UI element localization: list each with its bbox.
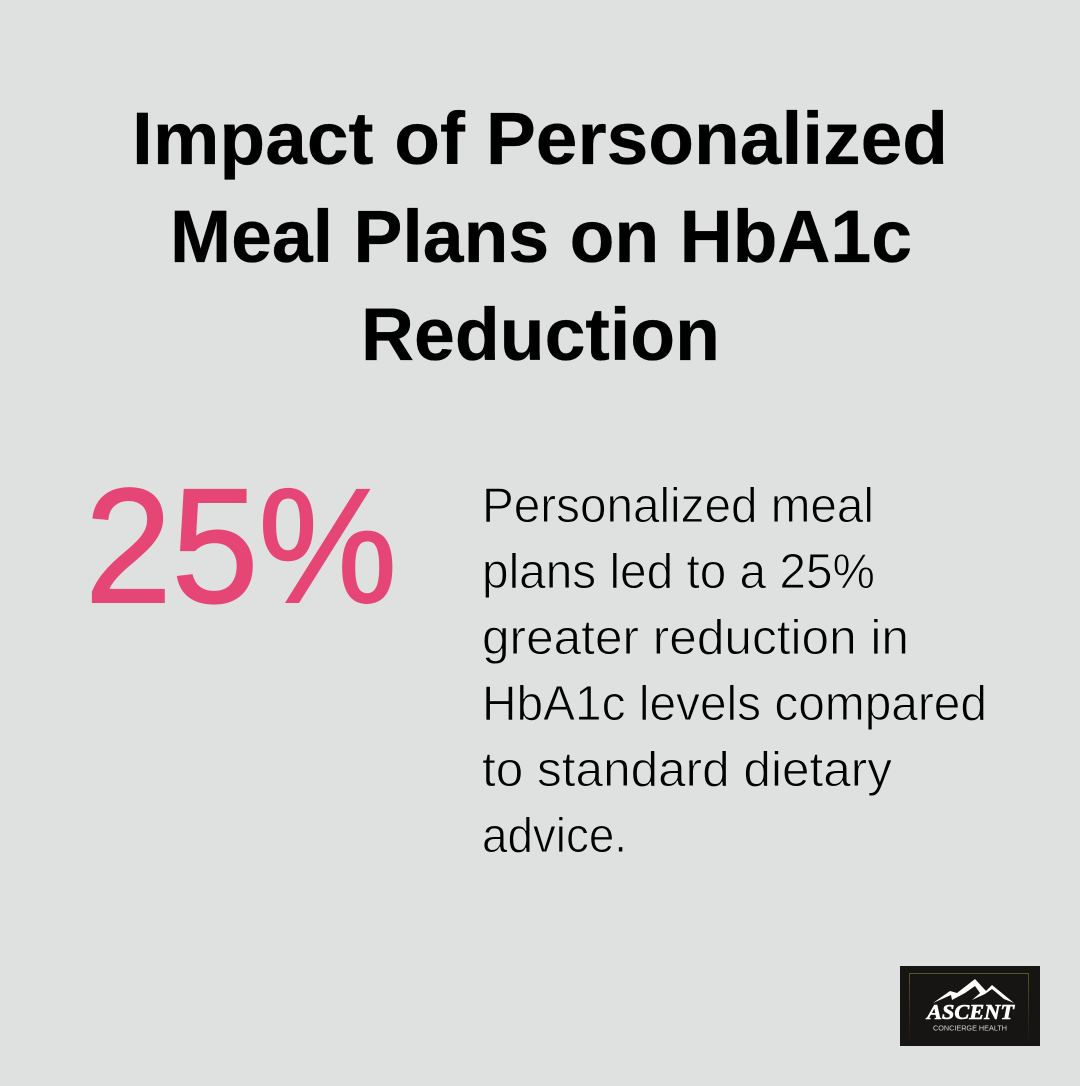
big statistic: 25%: 25%	[85, 454, 397, 637]
icon: mountains	[933, 979, 1014, 1003]
title: Meal Plans on HbA1c	[170, 195, 912, 278]
description text: Personalized meal	[482, 479, 874, 533]
logo: Ascent Concierge Health	[900, 966, 1040, 1046]
logo wordmark: ASCENT	[925, 1000, 1015, 1024]
logo tagline: CONCIERGE HEALTH	[933, 1024, 1007, 1032]
title	[132, 97, 948, 376]
description text	[482, 479, 987, 863]
title: Reduction	[361, 293, 720, 376]
description text: greater reduction in	[482, 611, 909, 665]
title: Impact of Personalized	[132, 97, 948, 180]
description text: advice.	[482, 809, 627, 863]
description text: HbA1c levels compared	[482, 677, 987, 731]
description text: to standard dietary	[482, 743, 892, 797]
description text: plans led to a 25%	[482, 545, 875, 599]
